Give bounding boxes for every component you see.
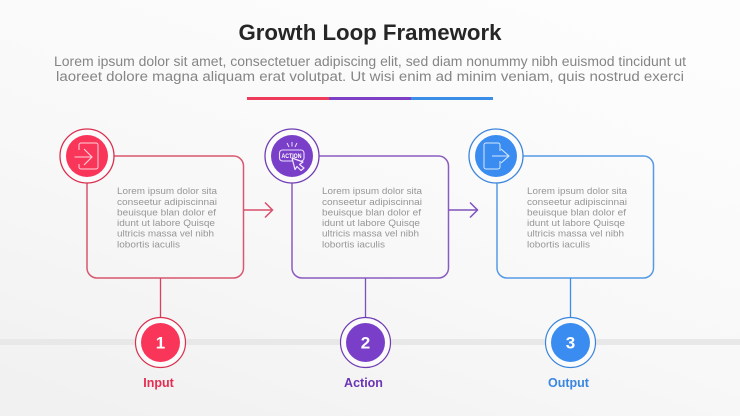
input text: conseetur adipiscinnai (117, 197, 217, 207)
step 1 label: Input (143, 376, 175, 390)
icon: action button: ACTION (282, 153, 302, 160)
step 2 badge (340, 318, 390, 368)
icon: action button (265, 129, 319, 183)
action card outline (292, 156, 448, 278)
input text: ultricis massa vel nibh (117, 228, 214, 238)
action text: Lorem ipsum dolor sita (322, 186, 422, 196)
input text: idunt ut labore Quisqe (117, 218, 215, 228)
action connector (364, 278, 366, 320)
panel: action (265, 129, 448, 320)
divider (247, 97, 493, 100)
arrow: action to output (449, 202, 478, 218)
action text: beuisque blan dolor ef (322, 208, 422, 218)
input card outline (87, 156, 244, 278)
output text: Lorem ipsum dolor sita (527, 186, 627, 196)
subtitle: laoreet dolore magna aliquam erat volutpat. Ut wisi enim ad minim veniam, quis nostrud exerci (56, 69, 684, 84)
input text: beuisque blan dolor ef (117, 208, 217, 218)
step 3 label: Output (548, 376, 590, 390)
icon: exit (469, 129, 523, 183)
action text (322, 186, 422, 250)
action text: lobortis iaculis (322, 240, 386, 250)
action text: idunt ut labore Quisqe (322, 218, 420, 228)
title: Growth Loop Framework (238, 20, 502, 45)
subtitle (54, 54, 686, 84)
output connector (570, 278, 572, 320)
step 1 badge (136, 318, 186, 368)
input text: Lorem ipsum dolor sita (117, 186, 217, 196)
output text: ultricis massa vel nibh (527, 228, 624, 238)
output text (527, 186, 627, 250)
step 2 badge: 2 (361, 334, 370, 352)
input text: lobortis iaculis (117, 240, 181, 250)
output text: beuisque blan dolor ef (527, 208, 627, 218)
input text (117, 186, 217, 250)
timeline band (0, 339, 740, 345)
output text: lobortis iaculis (527, 240, 591, 250)
output card outline (497, 156, 654, 278)
output text: conseetur adipiscinnai (527, 197, 627, 207)
step 3 badge: 3 (566, 334, 575, 352)
arrow: input to action (244, 202, 272, 218)
subtitle: Lorem ipsum dolor sit amet, consectetuer adipiscing elit, sed diam nonummy nibh euismod tincidunt ut (54, 54, 686, 69)
action text: conseetur adipiscinnai (322, 197, 422, 207)
step 1 badge: 1 (156, 334, 165, 352)
step 3 badge (546, 318, 596, 368)
icon: enter (60, 129, 114, 183)
action text: ultricis massa vel nibh (322, 228, 419, 238)
input connector (160, 278, 162, 320)
panel: output (469, 129, 654, 320)
output text: idunt ut labore Quisqe (527, 218, 625, 228)
step 2 label: Action (344, 376, 383, 390)
panel: input (60, 129, 244, 320)
